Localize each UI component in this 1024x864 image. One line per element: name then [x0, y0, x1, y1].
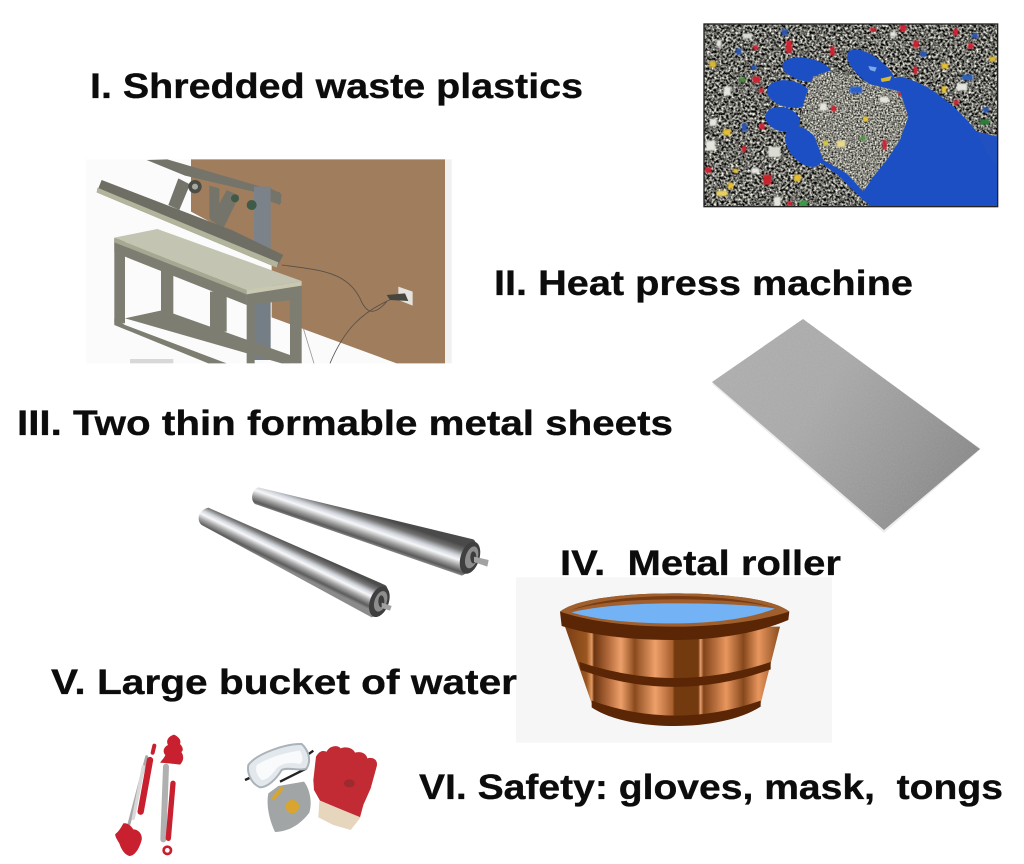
illustration: metal sheet [712, 319, 981, 533]
heading: shredded waste plastics: I. Shredded waste plastics [90, 67, 583, 106]
illustration: heat press machine [86, 159, 452, 363]
illustration: goggles, mask and gloves [245, 744, 377, 832]
power cable and wall outlet [282, 265, 395, 363]
bucket rim [560, 593, 789, 640]
front roller [199, 508, 394, 620]
heading: safety gear: VI. Safety: gloves, mask, tongs [419, 768, 1003, 807]
press lid platen [97, 180, 283, 268]
illustration: red tongs [115, 735, 183, 856]
bucket body [565, 627, 780, 720]
heading: large bucket of water: V. Large bucket of water [51, 663, 517, 702]
safety goggles [245, 744, 313, 787]
heading: heat press machine: II. Heat press machine [494, 264, 913, 303]
red gloves [313, 746, 377, 830]
heading: two thin formable metal sheets: III. Two thin formable metal sheets [17, 404, 673, 443]
illustration: bucket of water [516, 577, 832, 743]
water surface [572, 603, 775, 623]
handful of shredded plastic [800, 70, 908, 192]
photo: gloved hand holding shredded plastics [704, 24, 998, 208]
press upper frame [147, 159, 282, 253]
illustration: two metal rollers [199, 487, 489, 620]
back roller [252, 487, 489, 576]
glove [762, 42, 997, 208]
bench [114, 238, 302, 363]
heading: metal roller: IV. Metal roller [560, 544, 841, 583]
dust mask [268, 782, 311, 832]
